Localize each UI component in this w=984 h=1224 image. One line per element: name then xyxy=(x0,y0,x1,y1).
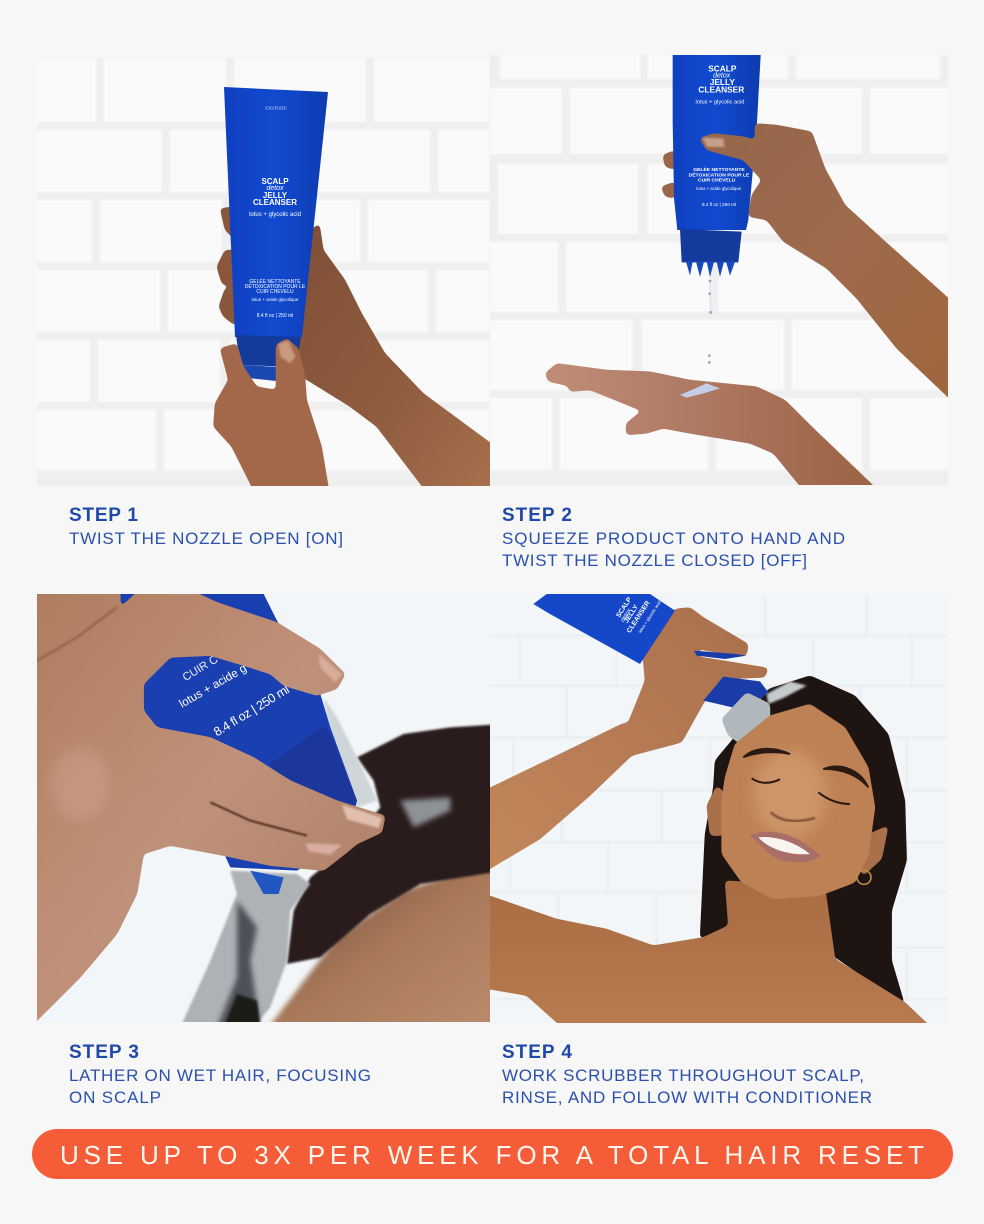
icon: blue product tube: JELLY xyxy=(263,191,288,200)
icon: raised arm and hand xyxy=(490,608,768,869)
icon: foam in hair xyxy=(400,797,450,827)
callout banner xyxy=(32,1129,953,1179)
icon: lower lather foam xyxy=(180,871,310,1027)
icon: blue product tube: DÉTOXICATION POUR LE xyxy=(245,283,306,290)
step 1 caption xyxy=(69,505,343,548)
icon: blue tube against scalp: lotus + acide g xyxy=(177,662,249,711)
icon: blue product tube: CLEANSER xyxy=(253,198,297,207)
icon: blue product tube: 8.4 fl oz | 250 ml xyxy=(257,313,293,319)
panel: step 4 photo xyxy=(470,594,948,1037)
icon: blue tube in raised hand: SCALP xyxy=(615,596,634,619)
step 3 caption: STEP 3 xyxy=(69,1042,139,1063)
icon: foam at hairline xyxy=(722,681,807,746)
icon: blue tube in raised hand: CLEANSER xyxy=(626,600,652,634)
panel: step 1 photo xyxy=(213,87,490,486)
step 1 caption: STEP 1 xyxy=(69,505,138,526)
icon: back hand and forearm xyxy=(298,226,490,486)
panel: step 3 photo xyxy=(37,594,490,1022)
step 2 caption: TWIST THE NOZZLE CLOSED [OFF] xyxy=(502,551,807,570)
icon: jelly stream xyxy=(708,280,712,364)
icon: fingers behind tube xyxy=(217,207,234,324)
icon: blue product tube: detox xyxy=(266,185,284,192)
icon: upside-down blue tube: lotus + acide glycolique xyxy=(696,186,742,191)
icon: blue tube against scalp: 8.4 fl oz | 250 ml xyxy=(211,682,292,739)
step 4 caption: RINSE, AND FOLLOW WITH CONDITIONER xyxy=(502,1088,872,1107)
step 3 caption: ON SCALP xyxy=(69,1088,161,1107)
icon: upside-down blue tube: 8.4 fl oz | 250 ml xyxy=(702,202,736,207)
icon: jelly on palm xyxy=(680,383,720,398)
icon: long dark hair xyxy=(700,676,907,1006)
icon: front hand holding nozzle xyxy=(213,338,330,497)
icon: blue product tube: KAVRANI xyxy=(265,106,287,112)
icon: blue product tube: SCALP xyxy=(261,177,289,186)
icon: upper hand and arm xyxy=(700,124,948,398)
icon: blue tube in raised hand: lotus + glycolic acid xyxy=(637,599,662,634)
icon: large hand xyxy=(37,594,385,1021)
step 3 caption: LATHER ON WET HAIR, FOCUSING xyxy=(69,1066,371,1085)
step 2 caption xyxy=(502,505,845,570)
step 4 caption: WORK SCRUBBER THROUGHOUT SCALP, xyxy=(502,1066,864,1085)
icon: blue product tube: GELÉE NETTOYANTE xyxy=(249,278,301,285)
icon: blue product tube: lotus + acide glycolique xyxy=(252,297,299,302)
icon: fingers behind tube xyxy=(662,151,674,198)
panel: step 2 photo xyxy=(546,55,948,485)
step 2 caption: STEP 2 xyxy=(502,505,572,526)
icon: lather along tube xyxy=(324,697,377,807)
icon: blue tube in raised hand: detox xyxy=(620,607,634,623)
icon: upside-down blue tube: DÉTOXICATION POUR LE xyxy=(689,170,750,178)
step 2 caption: SQUEEZE PRODUCT ONTO HAND AND xyxy=(502,529,845,548)
step 4 caption xyxy=(502,1042,872,1107)
icon: blue product tube: lotus + glycolic acid xyxy=(249,212,301,218)
icon: upside-down blue tube: CLEANSER xyxy=(698,84,744,94)
step 3 caption xyxy=(69,1042,371,1107)
callout banner: USE UP TO 3X PER WEEK FOR A TOTAL HAIR RESET xyxy=(60,1140,924,1170)
icon: dark hair xyxy=(287,724,504,964)
icon: upside-down blue tube: JELLY xyxy=(710,77,735,87)
icon: blue tube in raised hand xyxy=(533,594,768,711)
icon: upside-down blue tube: GELÉE NETTOYANTE xyxy=(693,165,745,173)
icon: upside-down blue tube: SCALP xyxy=(708,64,737,74)
icon: upside-down blue tube: detox xyxy=(713,73,731,80)
icon: neck and shoulders xyxy=(490,880,927,1023)
icon: open palm and arm xyxy=(546,364,873,485)
icon: upside-down blue tube xyxy=(673,55,761,277)
icon: upside-down blue tube: CUIR CHEVELU xyxy=(698,177,736,183)
icon: scalp skin xyxy=(268,871,490,1022)
icon: smiling face xyxy=(707,704,888,899)
step 1 caption: TWIST THE NOZZLE OPEN [ON] xyxy=(69,529,343,548)
icon: blue tube against scalp xyxy=(120,594,358,894)
icon: upside-down blue tube: lotus + glycolic acid xyxy=(696,100,744,106)
icon: blue product tube xyxy=(224,87,328,381)
step 4 caption: STEP 4 xyxy=(502,1042,572,1063)
icon: blue tube against scalp: CUIR C xyxy=(181,654,220,684)
icon: blue tube in raised hand: JELLY xyxy=(623,603,640,624)
icon: blue product tube: CUIR CHEVELU xyxy=(256,289,294,295)
